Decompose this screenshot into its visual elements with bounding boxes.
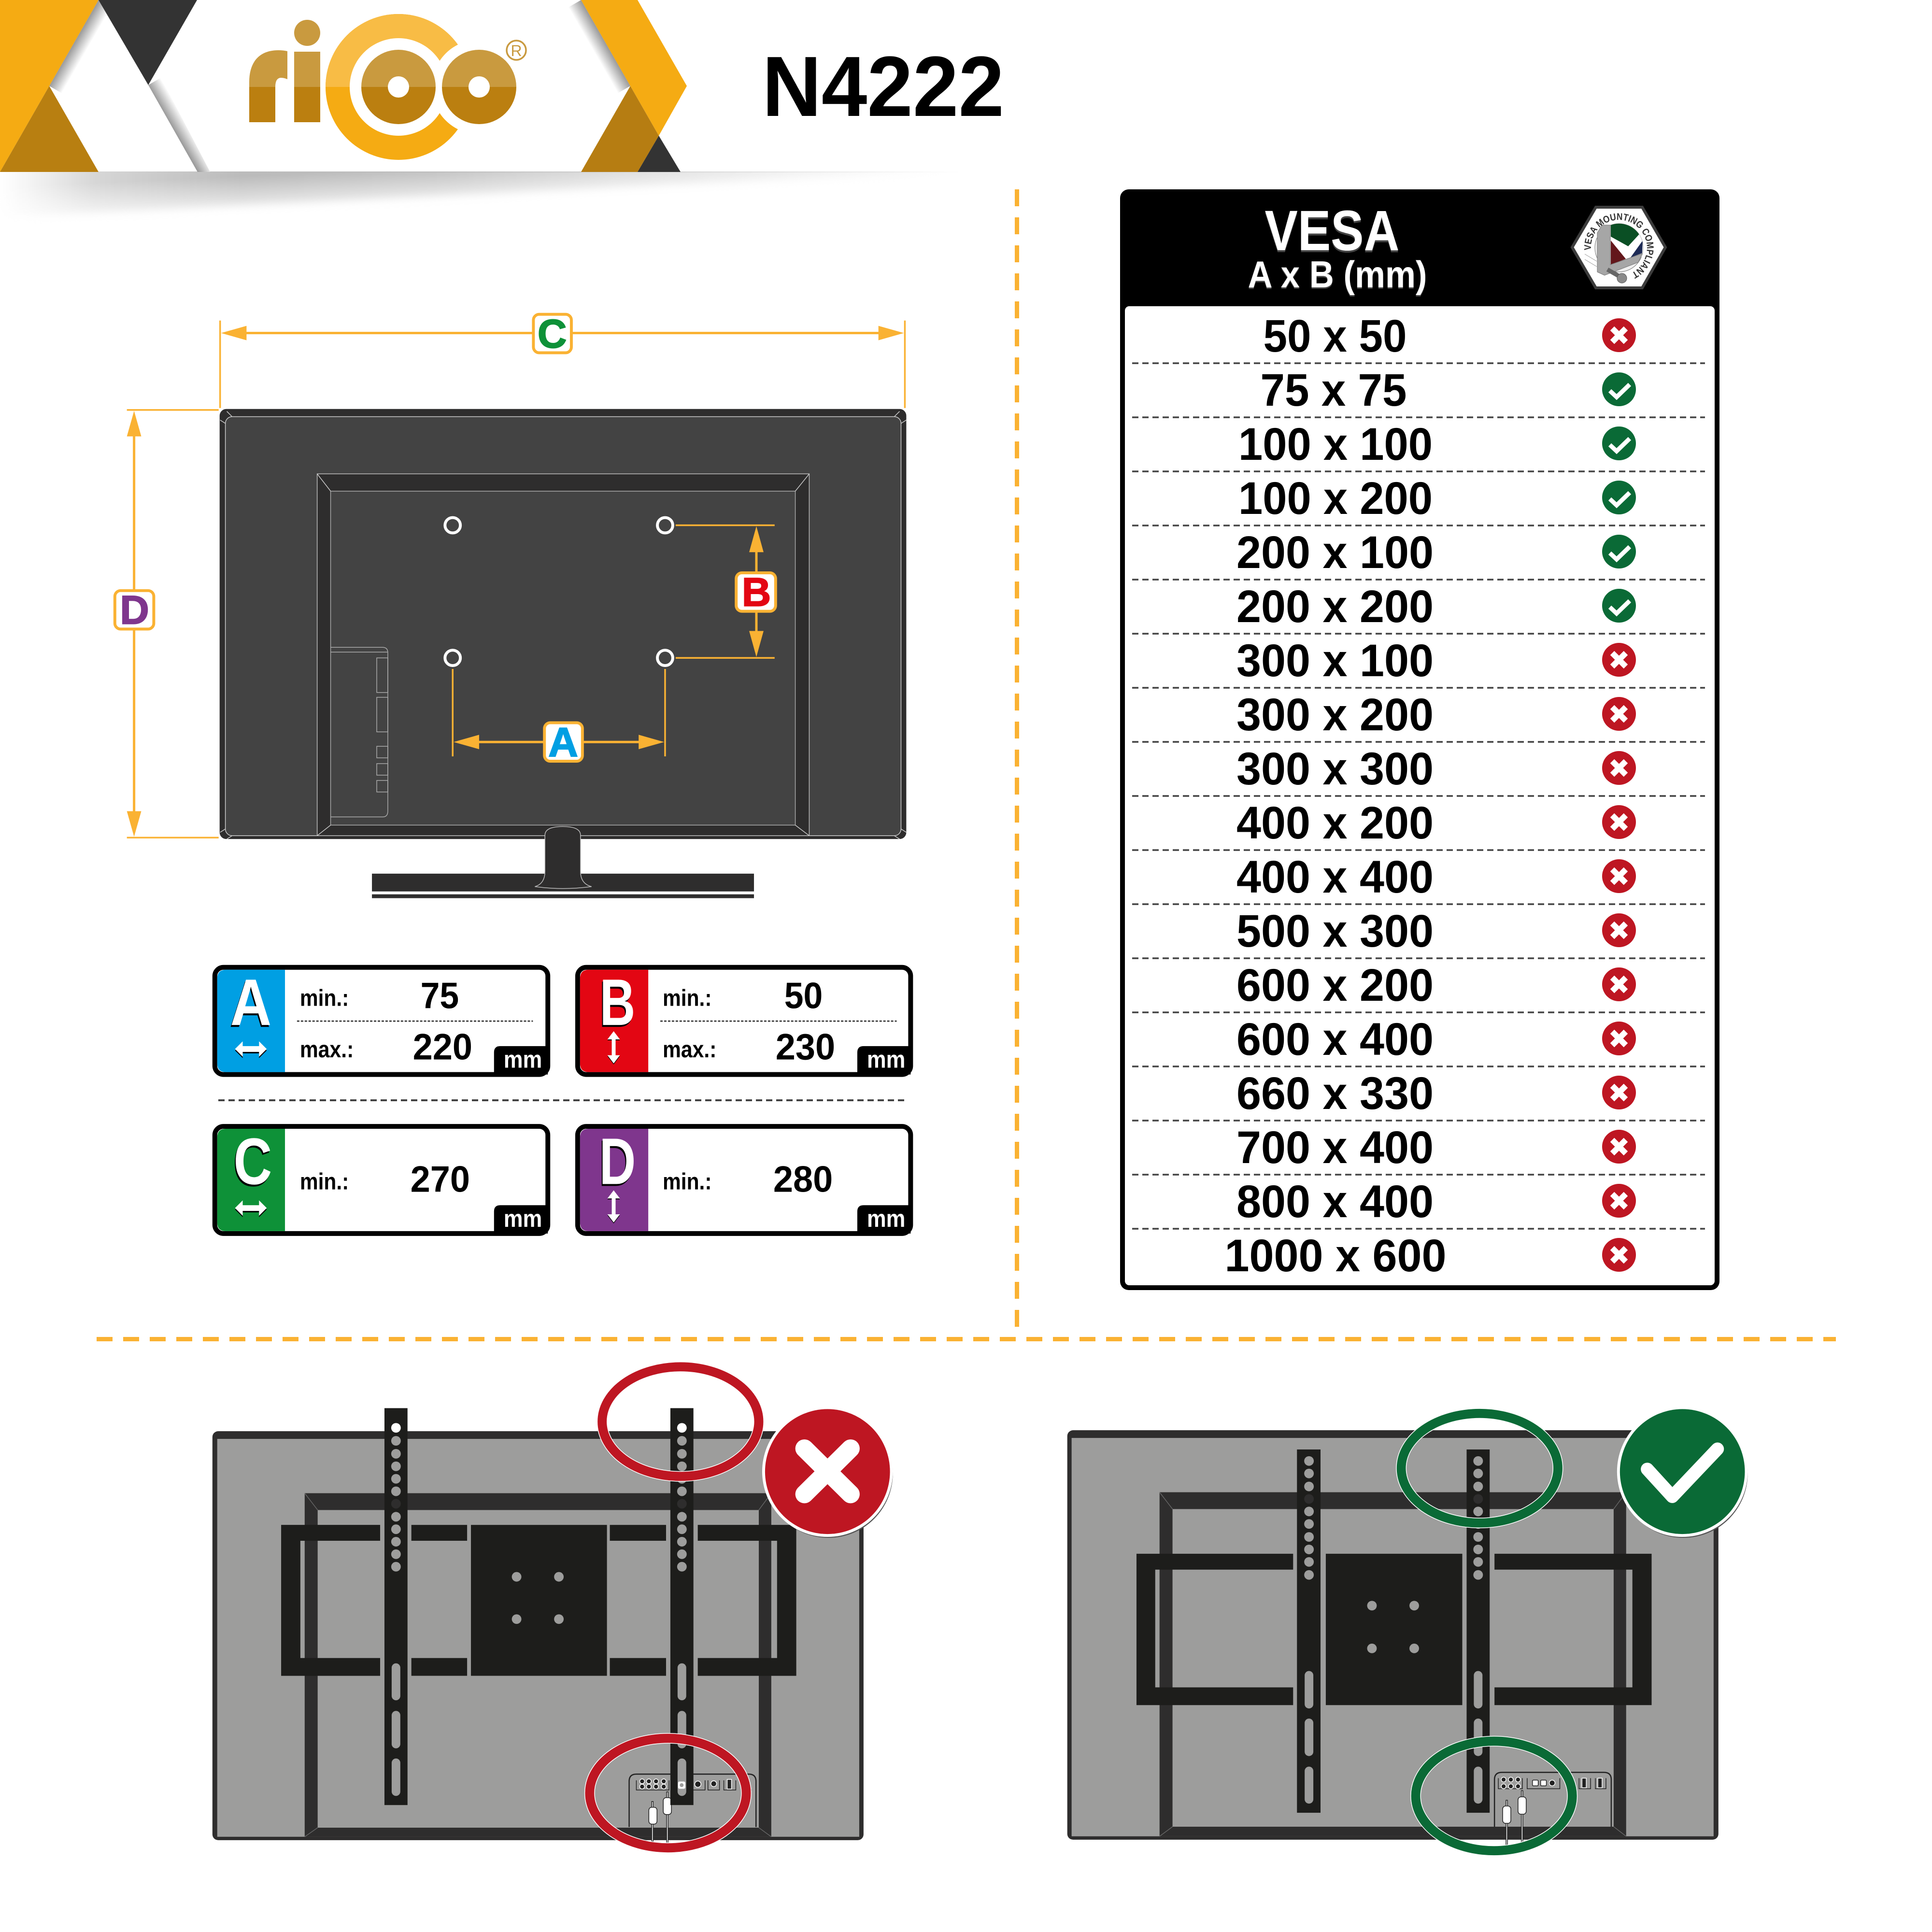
icon: VESA compliant badge: VESA MOUNTING COMPLIANT [1584, 213, 1654, 279]
card: dimension B [578, 966, 910, 1075]
card: dimension A [215, 966, 548, 1075]
icon: check badge [1617, 1406, 1747, 1538]
row: 300 x 200: 300 x 200 [1236, 689, 1434, 740]
row: 400 x 400: 400 x 400 [1236, 852, 1434, 903]
TV back [1067, 1430, 1719, 1840]
panel: correct mounting example [1067, 1406, 1747, 1851]
row: 600 x 400: 600 x 400 [1236, 1014, 1434, 1065]
card: dimension A: 220 [413, 1027, 472, 1068]
row: 75 x 75: 75 x 75 [1261, 365, 1406, 416]
row: 1000 x 600: 1000 x 600 [1225, 1230, 1446, 1281]
card: dimension C: min.: [300, 1169, 349, 1194]
bracket [281, 1525, 796, 1676]
row: 100 x 100: 100 x 100 [1238, 419, 1433, 470]
row: 400 x 200 [1132, 797, 1705, 850]
arrow: horizontal [235, 1041, 267, 1057]
table heading: A x B (mm) [1248, 253, 1427, 296]
row: 300 x 300: 300 x 300 [1236, 743, 1434, 795]
TV back [213, 1431, 864, 1840]
row: 600 x 400 [1132, 1014, 1705, 1066]
row: 800 x 400 [1132, 1176, 1705, 1229]
arrow: horizontal [235, 1200, 267, 1216]
card: dimension A: A [230, 966, 271, 1039]
row: 50 x 50: 50 x 50 [1264, 311, 1406, 362]
dimension B arrow: B [742, 569, 771, 615]
row: 400 x 200: 400 x 200 [1236, 797, 1434, 849]
dimension A arrow: A [548, 720, 578, 766]
horizontal section divider [97, 1337, 1836, 1341]
card: dimension C [215, 1124, 548, 1234]
row: 200 x 100 [1132, 527, 1705, 580]
row: 800 x 400: 800 x 400 [1236, 1176, 1434, 1227]
header banner [0, 0, 961, 217]
card: dimension B: B [600, 966, 635, 1039]
bracket [1136, 1554, 1651, 1705]
arrow: vertical [608, 1190, 620, 1222]
port panel [629, 1774, 756, 1827]
logo: ricoo [249, 14, 526, 160]
table heading: VESA [1264, 199, 1400, 263]
cards separator [218, 1099, 908, 1101]
row: 300 x 100: 300 x 100 [1236, 635, 1434, 686]
row: 100 x 200 [1132, 473, 1705, 526]
TV port panel [331, 647, 388, 817]
highlight ring: bottom [590, 1738, 746, 1848]
panel: TV rear dimension diagram [115, 311, 906, 898]
right rail [670, 1408, 694, 1805]
card: dimension D: min.: [663, 1169, 711, 1194]
unit tag: mm [504, 1046, 542, 1073]
row: 700 x 400 [1132, 1122, 1705, 1175]
row: 600 x 200: 600 x 200 [1236, 960, 1434, 1011]
row: 660 x 330: 660 x 330 [1236, 1068, 1434, 1119]
table heading [1248, 199, 1427, 296]
port panel [1494, 1773, 1611, 1827]
card: dimension A: min.: [300, 985, 349, 1011]
row: 500 x 300 [1132, 906, 1705, 958]
row: 200 x 100: 200 x 100 [1236, 527, 1434, 578]
row: 1000 x 600 [1225, 1230, 1636, 1281]
dimension D arrow: D [120, 587, 149, 632]
card: dimension C: 270 [411, 1159, 470, 1200]
dimension C arrow: C [538, 311, 567, 356]
panel: VESA compatibility table [1120, 189, 1719, 1290]
card: dimension D [578, 1124, 910, 1234]
TV stand [372, 826, 754, 898]
cables [649, 1792, 671, 1843]
mounting plate holes [1367, 1601, 1419, 1653]
VESA mounting holes [445, 518, 673, 666]
card: dimension D: 280 [773, 1159, 833, 1200]
row: 600 x 200 [1132, 960, 1705, 1012]
row: 700 x 400: 700 x 400 [1236, 1122, 1434, 1173]
panel: incorrect mounting example [213, 1367, 893, 1848]
cables [1503, 1790, 1526, 1845]
arrow: vertical [608, 1031, 620, 1064]
unit tag: mm [867, 1205, 905, 1232]
highlight ring: bottom [1416, 1741, 1572, 1851]
title: model number: N4222 [762, 39, 1004, 134]
left rail [384, 1408, 408, 1805]
row: 300 x 200 [1132, 689, 1705, 742]
dimension C arrow [220, 311, 905, 408]
row: 300 x 300 [1132, 743, 1705, 796]
logo: ricoo: R [511, 42, 522, 59]
row: 500 x 300: 500 x 300 [1236, 906, 1434, 957]
card: dimension D: D [599, 1124, 636, 1198]
unit tag: mm [504, 1205, 542, 1232]
mounting plate holes [512, 1572, 564, 1624]
card: dimension B: 230 [776, 1027, 835, 1068]
dimension A arrow [453, 669, 665, 766]
unit tag: mm [867, 1046, 905, 1073]
row: 660 x 330 [1132, 1068, 1705, 1121]
card: dimension B: 50 [784, 976, 823, 1016]
card: dimension C: C [234, 1124, 272, 1198]
right rail [1466, 1449, 1490, 1813]
row: 300 x 100 [1132, 635, 1705, 688]
vertical section divider [1015, 189, 1019, 1327]
highlight ring: top [602, 1367, 759, 1477]
row: 100 x 100 [1132, 419, 1705, 471]
card: dimension A: 75 [421, 976, 459, 1016]
left rail [1297, 1449, 1321, 1813]
dimension D arrow [115, 410, 219, 838]
row: 200 x 200 [1132, 581, 1705, 634]
row: 75 x 75 [1132, 365, 1705, 417]
row: 50 x 50 [1132, 311, 1705, 363]
row: 400 x 400 [1132, 852, 1705, 904]
icon: VESA compliant badge [1571, 206, 1667, 289]
icon: cross badge [762, 1406, 893, 1538]
card: dimension A: max.: [300, 1037, 354, 1063]
TV body [220, 409, 906, 839]
panel: dimension cards [215, 966, 910, 1234]
dimension B arrow [676, 526, 776, 658]
row: 100 x 200: 100 x 200 [1238, 473, 1433, 524]
highlight ring: top [1401, 1413, 1558, 1523]
card: dimension B: max.: [663, 1037, 716, 1063]
card: dimension B: min.: [663, 985, 711, 1011]
row: 200 x 200: 200 x 200 [1236, 581, 1434, 632]
